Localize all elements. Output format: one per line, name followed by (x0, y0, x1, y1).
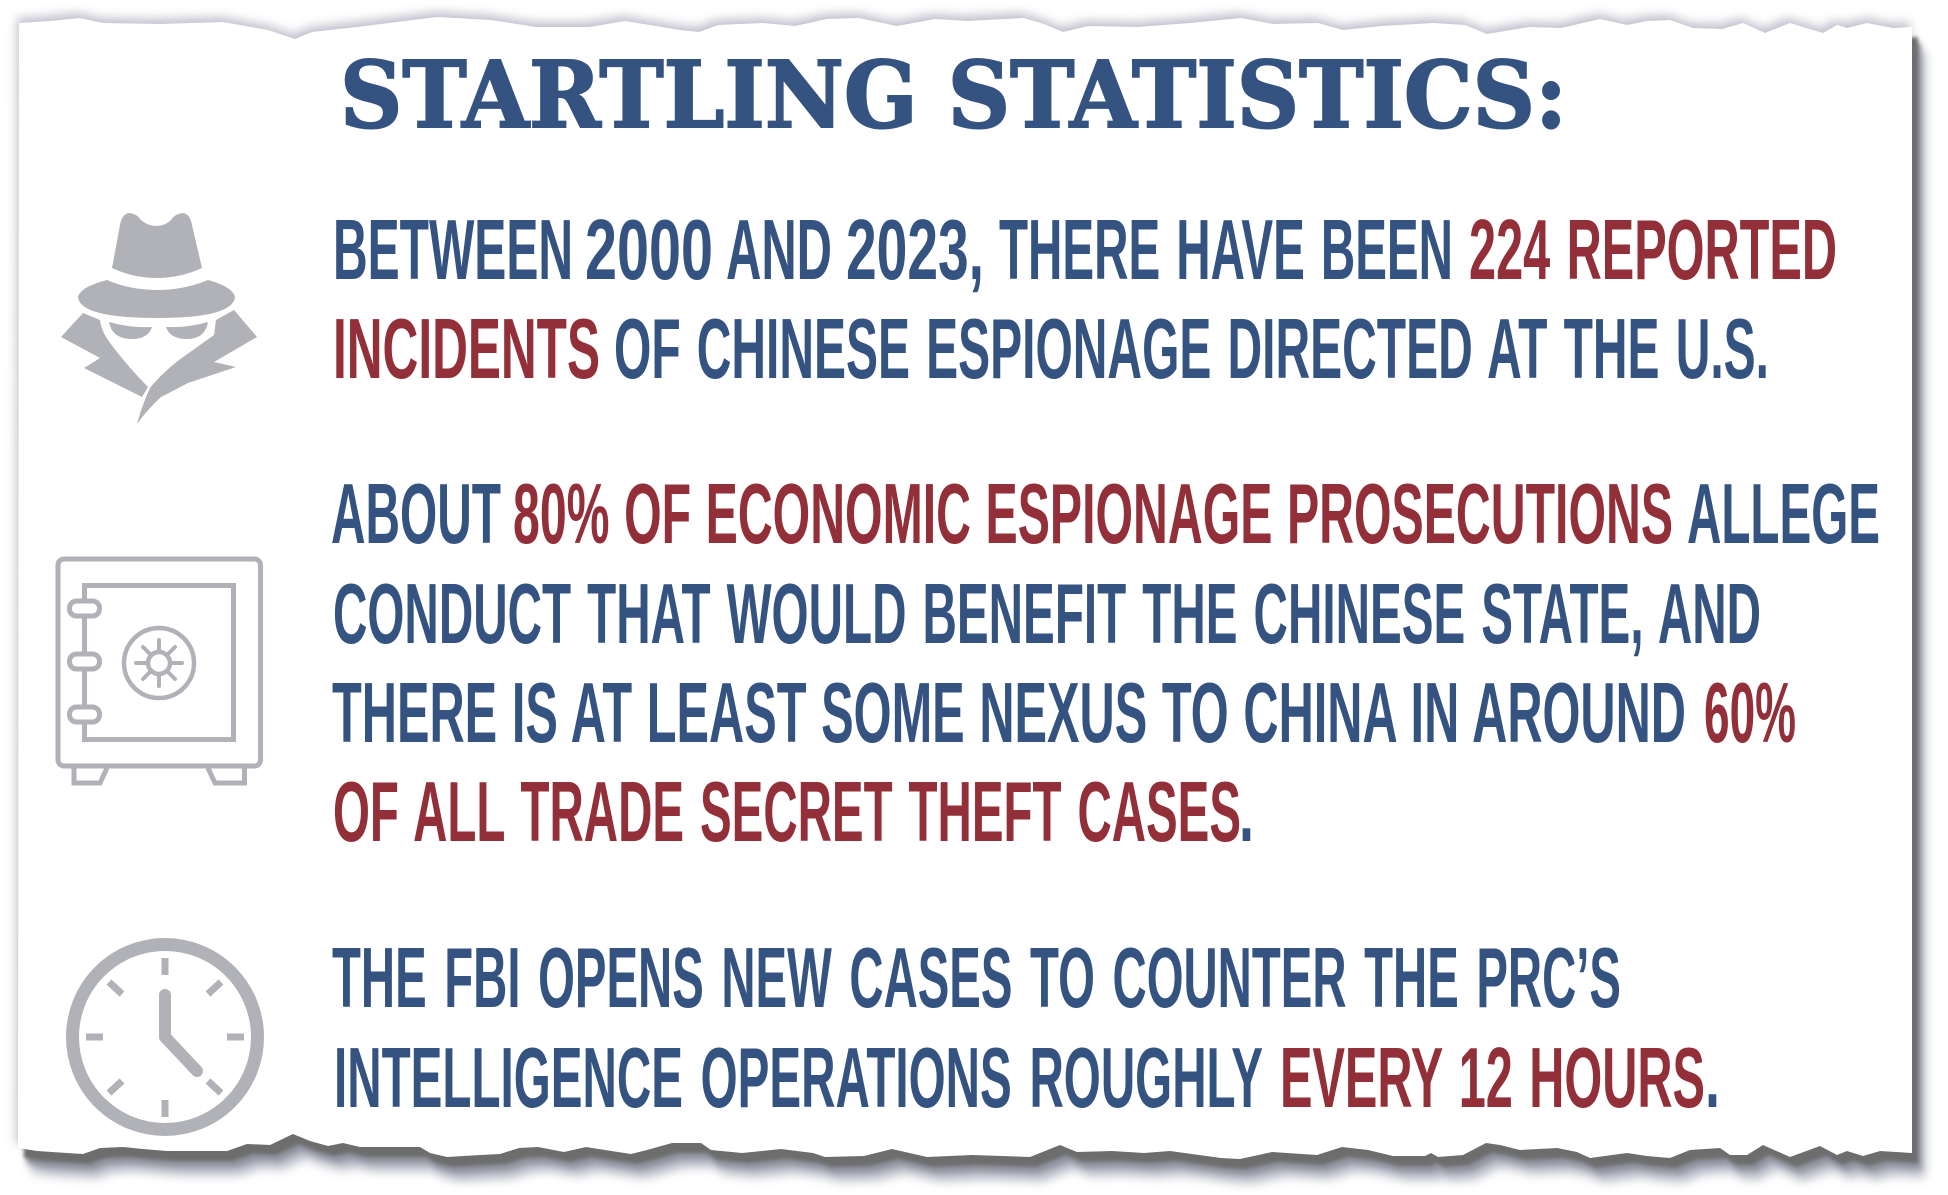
statistic 1 text: THERE HAVE BEEN (999, 203, 1453, 298)
statistic 2 text: 60% (1704, 666, 1796, 761)
statistic 1 text: 2023, (846, 203, 984, 298)
statistic 1 text: INCIDENTS (333, 302, 600, 397)
statistic 1 text: BETWEEN (333, 203, 573, 298)
statistic 3 text: . (1705, 1031, 1720, 1126)
statistic 2 text: OF ALL TRADE SECRET THEFT CASES (333, 765, 1241, 860)
statistic 3 text: INTELLIGENCE OPERATIONS ROUGHLY (334, 1031, 1263, 1126)
icon: spy (61, 213, 257, 424)
statistic 2 text: . (1239, 765, 1254, 860)
icon: safe (58, 559, 260, 783)
statistic 1 text (333, 203, 1837, 397)
statistic 1 text: 2000 (585, 203, 713, 298)
statistic 2 text (331, 467, 1880, 860)
icon: clock (72, 944, 258, 1130)
statistic 1 text: AND (726, 203, 832, 298)
title: STARTLING STATISTICS: (340, 41, 1567, 149)
statistic 3 text (332, 931, 1720, 1126)
statistic 2 text: ABOUT (331, 467, 501, 562)
